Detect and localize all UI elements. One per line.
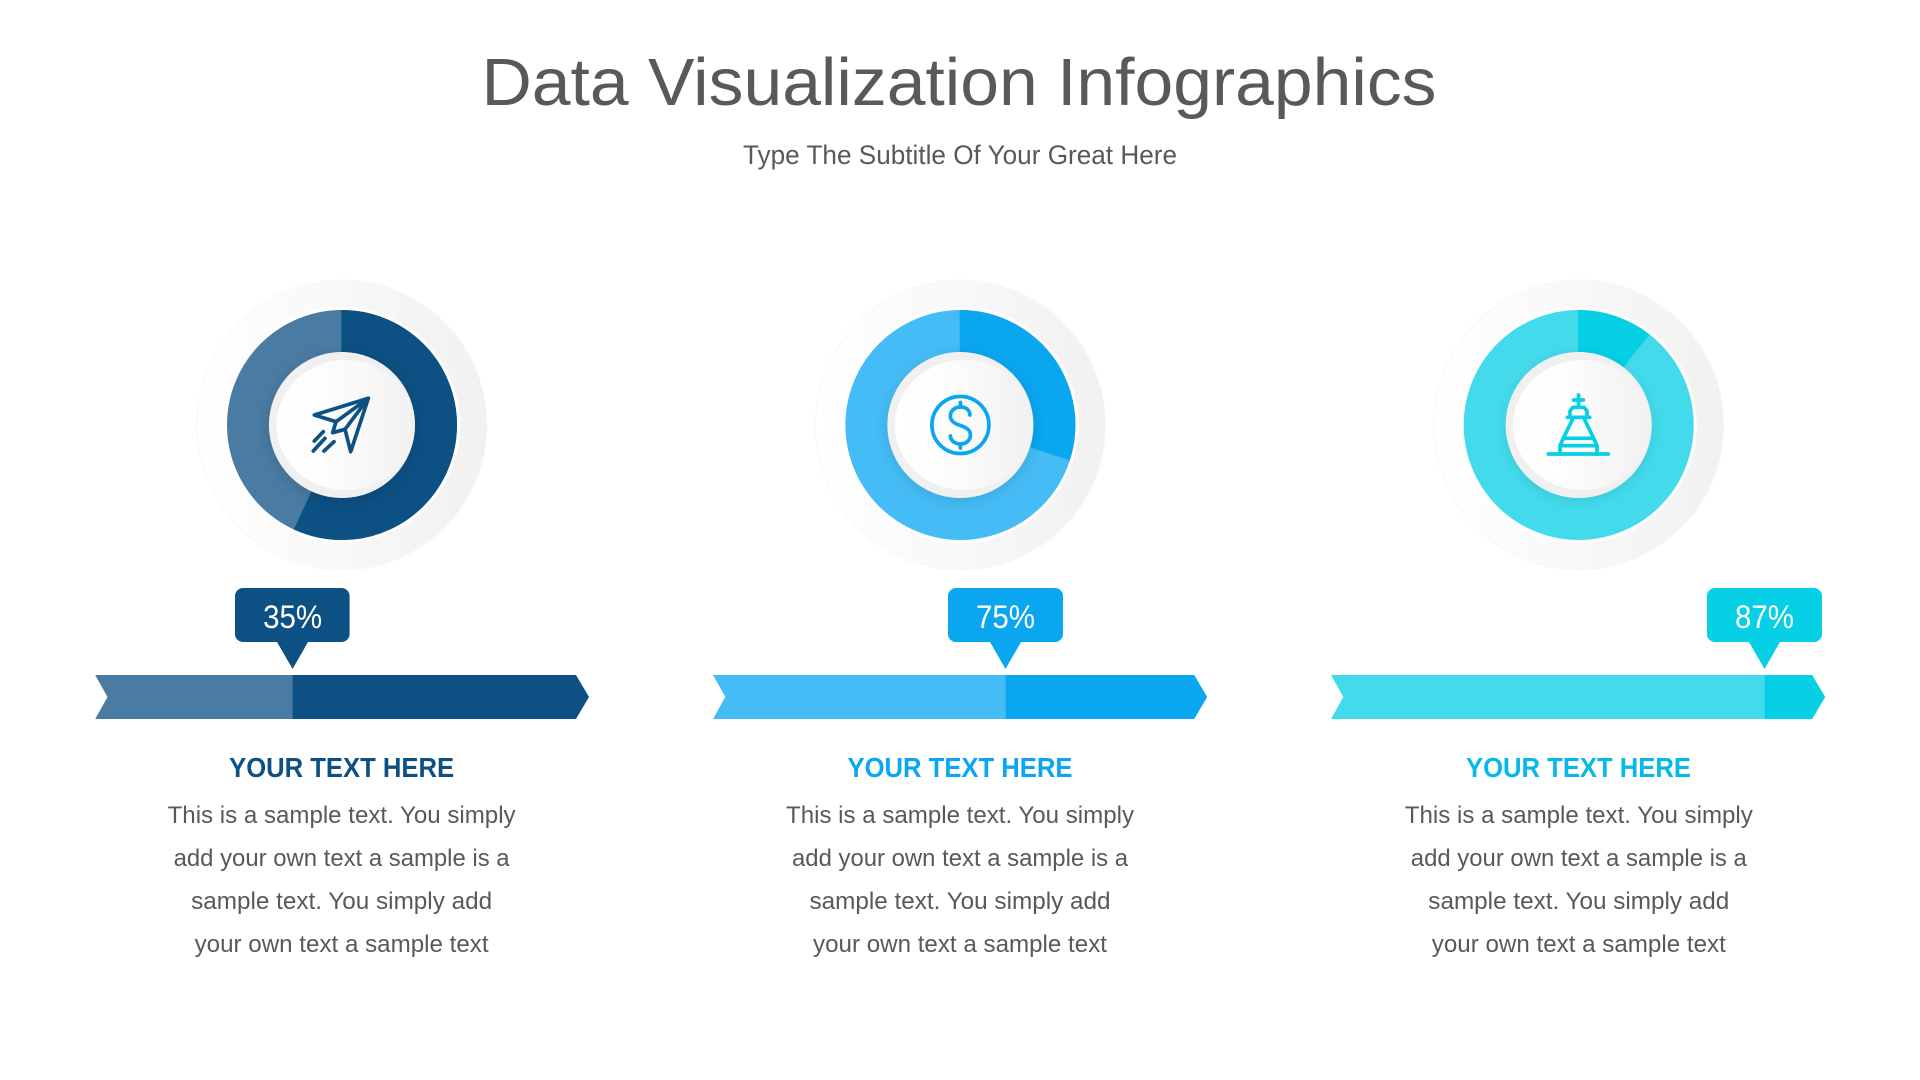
callout 87%: 87% xyxy=(1735,599,1794,635)
panel: column 3 xyxy=(1331,280,1825,958)
heading: YOUR TEXT HERE xyxy=(848,752,1072,783)
subtitle: Type The Subtitle Of Your Great Here xyxy=(743,140,1177,170)
body text: This is a sample text. You simply xyxy=(1405,802,1754,829)
panel: column 1 xyxy=(95,280,589,958)
callout 35% xyxy=(235,588,350,669)
donut chart 35% xyxy=(197,280,487,570)
progress bar 35% xyxy=(95,675,589,719)
body text: your own text a sample text xyxy=(813,931,1107,958)
heading: YOUR TEXT HERE xyxy=(1466,752,1691,783)
body text xyxy=(1405,802,1754,958)
icon: chess king xyxy=(1548,395,1608,454)
body text: add your own text a sample is a xyxy=(792,845,1128,872)
icon: dollar coin xyxy=(932,396,989,454)
body text: add your own text a sample is a xyxy=(174,845,510,872)
icon: paper plane xyxy=(313,398,368,452)
body text: add your own text a sample is a xyxy=(1411,845,1747,872)
body text: This is a sample text. You simply xyxy=(168,802,516,829)
body text: your own text a sample text xyxy=(195,931,489,958)
body text: sample text. You simply add xyxy=(1428,888,1729,915)
donut chart 87% xyxy=(1434,280,1724,570)
title: Data Visualization Infographics xyxy=(482,45,1436,120)
donut chart 75% xyxy=(815,280,1105,570)
body text: sample text. You simply add xyxy=(191,888,492,915)
progress bar 75% xyxy=(713,675,1207,719)
callout 87% xyxy=(1707,588,1822,669)
heading: YOUR TEXT HERE xyxy=(229,752,454,783)
body text xyxy=(786,802,1135,958)
body text xyxy=(168,802,516,958)
callout 75%: 75% xyxy=(976,599,1035,635)
body text: your own text a sample text xyxy=(1432,931,1726,958)
progress bar 87% xyxy=(1331,675,1825,719)
callout 75% xyxy=(948,588,1063,669)
callout 35%: 35% xyxy=(263,599,322,635)
body text: sample text. You simply add xyxy=(810,888,1110,915)
body text: This is a sample text. You simply xyxy=(786,802,1135,829)
panel: column 2 xyxy=(713,280,1207,958)
